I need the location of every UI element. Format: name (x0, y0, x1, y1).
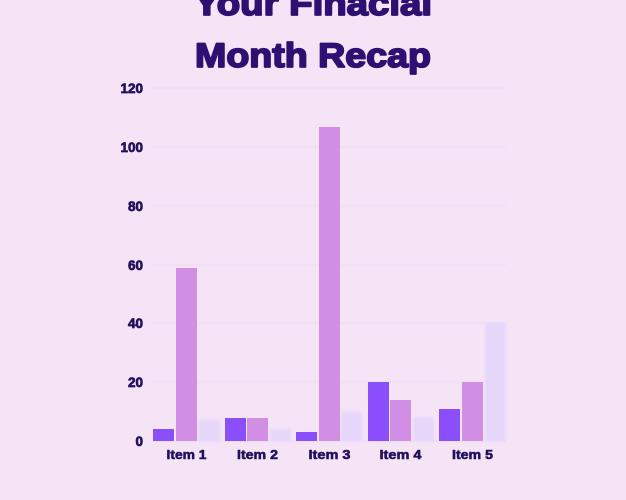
title (194, 0, 432, 75)
y axis labels (120, 81, 143, 449)
x axis labels: Item 4 (380, 447, 422, 462)
bar chart (120, 81, 506, 462)
title: Month Recap (195, 37, 431, 75)
y axis labels: 60 (128, 258, 143, 273)
light series bars (198, 323, 506, 441)
purple series bars (153, 382, 460, 441)
x axis labels: Item 2 (237, 447, 278, 462)
y axis labels: 100 (120, 140, 143, 155)
x axis labels (166, 447, 493, 462)
y axis labels: 0 (135, 434, 143, 449)
y axis labels: 80 (128, 199, 143, 214)
x axis labels: Item 1 (166, 447, 206, 462)
x axis labels: Item 5 (452, 447, 493, 462)
x axis labels: Item 3 (308, 447, 350, 462)
y axis labels: 20 (128, 375, 143, 390)
pink series bars (176, 127, 483, 441)
y axis labels: 40 (128, 316, 143, 331)
y axis labels: 120 (120, 81, 143, 96)
